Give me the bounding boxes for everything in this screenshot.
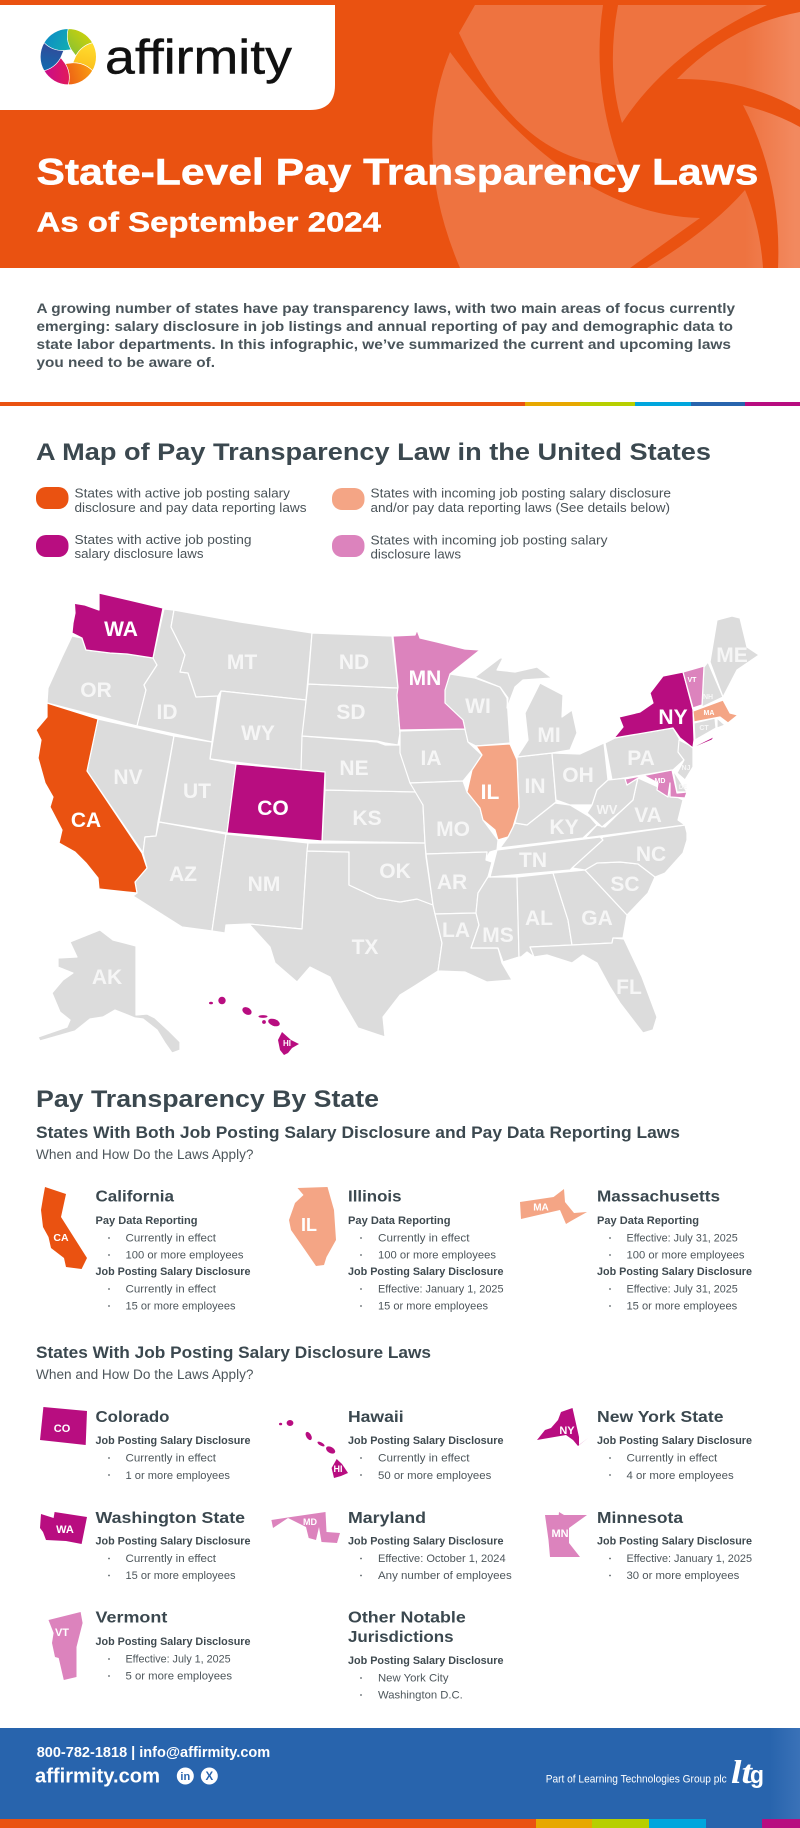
icon: Colorado: CO: [54, 1423, 71, 1435]
legend: active salary disclosure and pay data reporting: [36, 486, 306, 515]
intro text: emerging: salary disclosure in job listings and annual reporting of pay and demographic data to: [36, 318, 733, 334]
card: California: Pay Data Reporting: [96, 1215, 198, 1227]
subheading: salary disclosure laws: States With Job Posting Salary Disclosure Laws: [36, 1344, 431, 1362]
card: Massachusetts: 100 or more employees: [626, 1250, 745, 1262]
LTG logo: lt: [731, 1755, 753, 1791]
highlighted state labels: CA: [71, 809, 101, 832]
card: Massachusetts: Pay Data Reporting: [597, 1215, 699, 1227]
card: Vermont: 5 or more employees: [126, 1670, 233, 1682]
grey state labels: WV: [597, 802, 618, 817]
card: Hawaii: Job Posting Salary Disclosure: [348, 1435, 504, 1447]
card: Illinois: Job Posting Salary Disclosure: [348, 1266, 504, 1278]
legend: active salary disclosure: salary disclosure laws: [74, 547, 204, 561]
card: California: Currently in effect: [126, 1284, 216, 1296]
icon: X: X: [205, 1771, 213, 1783]
grey state labels: AZ: [169, 863, 197, 886]
highlighted state labels: VT: [688, 677, 697, 684]
LTG tagline: Part of Learning Technologies Group plc: [546, 1774, 727, 1786]
grey state labels: FL: [616, 976, 642, 999]
icon: Maryland: MD: [303, 1517, 317, 1527]
card: New York State: New York State: [597, 1409, 724, 1426]
card: Massachusetts: Job Posting Salary Disclosure: [597, 1266, 752, 1278]
grey state labels: KY: [549, 816, 579, 839]
icon: New York: [537, 1408, 588, 1446]
legend: incoming salary disclosure: [332, 534, 608, 562]
legend: active salary disclosure: [36, 533, 252, 561]
card: Massachusetts: Effective: July 31, 2025: [626, 1284, 738, 1296]
icon: X: [201, 1768, 218, 1784]
icon: Illinois: IL: [301, 1215, 317, 1235]
card: Washington State: Currently in effect: [126, 1553, 216, 1565]
grey state labels: NC: [636, 843, 666, 866]
intro text: you need to be aware of.: [36, 354, 215, 370]
icon: Maryland: [271, 1512, 340, 1543]
non-highlighted states: [38, 609, 759, 1053]
legend: incoming salary disclosure: States with incoming job posting salary: [370, 534, 608, 548]
card: Other Notable Jurisdictions: New York City: [378, 1673, 449, 1685]
grey state labels: ND: [339, 651, 369, 674]
US map: [36, 593, 759, 1055]
grey state labels: AK: [92, 966, 122, 989]
card: Other Notable Jurisdictions: [348, 1610, 504, 1702]
icon: Vermont: [48, 1612, 83, 1680]
grey state labels: KS: [352, 807, 382, 830]
icon: Minnesota: MN: [551, 1528, 569, 1540]
card: Maryland: Effective: October 1, 2024: [378, 1553, 506, 1565]
grey state labels: NM: [248, 873, 280, 896]
legend: incoming salary disclosure or pay data: [332, 486, 671, 515]
card: Other Notable Jurisdictions: Jurisdictions: [348, 1629, 454, 1646]
grey state labels: TN: [519, 849, 547, 872]
grey state labels: ME: [716, 644, 748, 667]
card: Other Notable Jurisdictions: Other Notable: [348, 1610, 466, 1627]
icon: Minnesota: [545, 1512, 587, 1557]
card: Colorado: Currently in effect: [126, 1452, 216, 1464]
card: Vermont: Job Posting Salary Disclosure: [96, 1636, 250, 1648]
card: Illinois: Pay Data Reporting: [348, 1215, 450, 1227]
rainbow divider: [0, 402, 800, 406]
map heading: A Map of Pay Transparency Law in the United States: [36, 439, 711, 466]
highlighted state labels: MA: [704, 710, 714, 717]
legend: incoming salary disclosure: disclosure laws: [370, 548, 461, 562]
highlighted state labels: CO: [257, 797, 289, 820]
icon: Illinois: [289, 1187, 336, 1266]
grey state labels: VA: [634, 804, 662, 827]
card: Minnesota: 30 or more employees: [626, 1570, 740, 1582]
card: Colorado: Job Posting Salary Disclosure: [96, 1435, 250, 1447]
card: Minnesota: [545, 1510, 752, 1582]
grey state labels: TX: [352, 936, 378, 959]
card: Washington State: 15 or more employees: [126, 1570, 236, 1582]
grey state labels: [80, 644, 748, 999]
grey state labels: NH: [703, 694, 713, 701]
card: California: 15 or more employees: [126, 1300, 236, 1312]
legend: active salary disclosure and pay data reporting: disclosure and pay data reporting laws: [74, 501, 306, 515]
intro text: A growing number of states have pay transparency laws, with two main areas of focus currently: [36, 300, 735, 316]
logo panel: [0, 5, 335, 110]
subheading: both laws: States With Both Job Posting Salary Disclosure and Pay Data Reporting Laws: [36, 1124, 680, 1142]
grey state labels: PA: [627, 747, 655, 770]
highlighted state labels: MD: [655, 778, 665, 785]
highlighted state labels: NY: [658, 706, 688, 729]
grey state labels: MI: [537, 724, 561, 747]
highlighted state labels: IL: [481, 781, 499, 804]
card: Minnesota: Job Posting Salary Disclosure: [597, 1536, 752, 1548]
card: Maryland: Maryland: [348, 1510, 426, 1527]
card: Other Notable Jurisdictions: Job Posting Salary Disclosure: [348, 1655, 504, 1667]
card: Illinois: Illinois: [348, 1189, 402, 1206]
icon: LinkedIn: in: [180, 1771, 190, 1783]
subtitle: As of September 2024: [36, 207, 381, 238]
card: Minnesota: Minnesota: [597, 1510, 683, 1527]
section heading: by state: Pay Transparency By State: [36, 1086, 379, 1113]
grey state labels: OK: [379, 860, 411, 883]
card: Massachusetts: [520, 1189, 752, 1312]
grey state labels: SC: [610, 873, 640, 896]
grey state labels: DE: [679, 785, 687, 791]
card: Maryland: Job Posting Salary Disclosure: [348, 1536, 504, 1548]
grey state labels: MS: [482, 924, 514, 947]
card: Washington State: Washington State: [96, 1510, 245, 1527]
grey state labels: OH: [562, 764, 594, 787]
card: Massachusetts: Effective: July 31, 2025: [626, 1232, 738, 1244]
grey state labels: NE: [339, 757, 369, 780]
footer contact line: 800-782-1818 | info@affirmity.com: [37, 1744, 270, 1761]
card: Hawaii: [279, 1409, 504, 1482]
grey state labels: UT: [183, 780, 211, 803]
aperture pattern: [432, 5, 800, 268]
card: California: Job Posting Salary Disclosure: [96, 1266, 250, 1278]
card: California: California: [96, 1189, 174, 1206]
grey state labels: MO: [436, 818, 470, 841]
icon: New York: NY: [559, 1425, 575, 1437]
legend: active salary disclosure: States with active job posting: [74, 533, 252, 547]
card: Illinois: Currently in effect: [378, 1232, 470, 1244]
card: Massachusetts: Massachusetts: [597, 1189, 720, 1206]
icon: Hawaii: [279, 1420, 348, 1478]
grey state labels: GA: [581, 907, 613, 930]
logo wordmark: affirmity: [105, 31, 292, 84]
card: California: Currently in effect: [126, 1232, 216, 1244]
legend: active salary disclosure and pay data reporting: States with active job posting salary: [74, 486, 291, 500]
card: New York State: Job Posting Salary Disclosure: [597, 1435, 752, 1447]
card: Washington State: Job Posting Salary Disclosure: [96, 1536, 250, 1548]
card: Maryland: [271, 1510, 512, 1582]
icon: Colorado: [40, 1407, 87, 1445]
icon: Hawaii: HI: [334, 1464, 342, 1474]
grey state labels: NV: [113, 766, 143, 789]
card: Illinois: Effective: January 1, 2025: [378, 1284, 504, 1296]
card: New York State: [537, 1408, 752, 1482]
footer rainbow stripe: [0, 1819, 800, 1828]
highlighted states: [36, 593, 738, 893]
card: Minnesota: Effective: January 1, 2025: [626, 1553, 752, 1565]
card: Other Notable Jurisdictions: Washington D.C.: [378, 1690, 463, 1702]
title: State-Level Pay Transparency Laws: [36, 152, 758, 192]
highlighted state labels: HI: [283, 1039, 291, 1048]
intro text: state labor departments. In this infographic, we’ve summarized the current and upcoming laws: [36, 336, 731, 352]
card: California: [41, 1187, 250, 1312]
card: Illinois: 100 or more employees: [378, 1250, 497, 1262]
card: New York State: 4 or more employees: [626, 1470, 734, 1482]
card: Illinois: 15 or more employees: [378, 1300, 488, 1312]
card: Massachusetts: 15 or more employees: [626, 1300, 738, 1312]
footer website: affirmity.com: [35, 1765, 160, 1788]
LTG logo: [731, 1755, 764, 1791]
card: Colorado: 1 or more employees: [126, 1470, 231, 1482]
footer band: [0, 1728, 800, 1819]
card: Hawaii: Hawaii: [348, 1409, 404, 1426]
grey state labels: CT: [699, 725, 709, 732]
grey state labels: WY: [241, 722, 275, 745]
icon: Massachusetts: MA: [533, 1202, 549, 1214]
subheading note: When and How Do the Laws Apply?: [36, 1367, 253, 1382]
grey state labels: OR: [80, 679, 112, 702]
highlighted state labels: MN: [409, 667, 441, 690]
card: New York State: Currently in effect: [626, 1452, 717, 1464]
card: Hawaii: Currently in effect: [378, 1452, 470, 1464]
icon: California: CA: [53, 1232, 69, 1244]
card: Colorado: Colorado: [96, 1409, 170, 1426]
header band: [0, 0, 800, 268]
highlighted state labels: WA: [104, 618, 138, 641]
subheading note: When and How Do the Laws Apply?: [36, 1147, 253, 1162]
grey state labels: IN: [524, 775, 546, 798]
Hawaii islands: [209, 997, 299, 1055]
icon: affirmity aperture logo: [32, 22, 105, 92]
icon: Washington: [40, 1512, 87, 1544]
card: California: 100 or more employees: [126, 1250, 244, 1262]
card: Maryland: Any number of employees: [378, 1570, 512, 1582]
highlighted state labels: [71, 618, 714, 1048]
grey state labels: IA: [420, 747, 442, 770]
card: Hawaii: 50 or more employees: [378, 1470, 492, 1482]
grey state labels: ID: [156, 701, 178, 724]
grey state labels: LA: [442, 919, 470, 942]
grey state labels: MT: [227, 651, 257, 674]
grey state labels: SD: [336, 701, 366, 724]
card: Illinois: [289, 1187, 504, 1312]
grey state labels: NJ: [682, 765, 691, 772]
card: Vermont: Effective: July 1, 2025: [126, 1654, 231, 1666]
legend: incoming salary disclosure or pay data: States with incoming job posting salary disclosure: [370, 486, 671, 500]
icon: Massachusetts: [520, 1189, 587, 1224]
intro text: [36, 300, 735, 370]
card: Vermont: Vermont: [96, 1610, 168, 1627]
grey state labels: AL: [525, 907, 553, 930]
LTG logo: g: [750, 1762, 764, 1789]
icon: LinkedIn: [177, 1768, 194, 1784]
map legend: [36, 486, 671, 562]
grey state labels: WI: [465, 695, 491, 718]
grey state labels: AR: [437, 871, 467, 894]
card: Colorado: [40, 1407, 250, 1482]
card: Vermont: [48, 1610, 250, 1682]
icon: California: [41, 1187, 87, 1269]
icon: Vermont: VT: [55, 1627, 69, 1639]
legend: incoming salary disclosure or pay data: and/or pay data reporting laws (See details below): [370, 501, 670, 515]
icon: Washington: WA: [56, 1524, 74, 1536]
card: Washington State: [40, 1510, 250, 1582]
